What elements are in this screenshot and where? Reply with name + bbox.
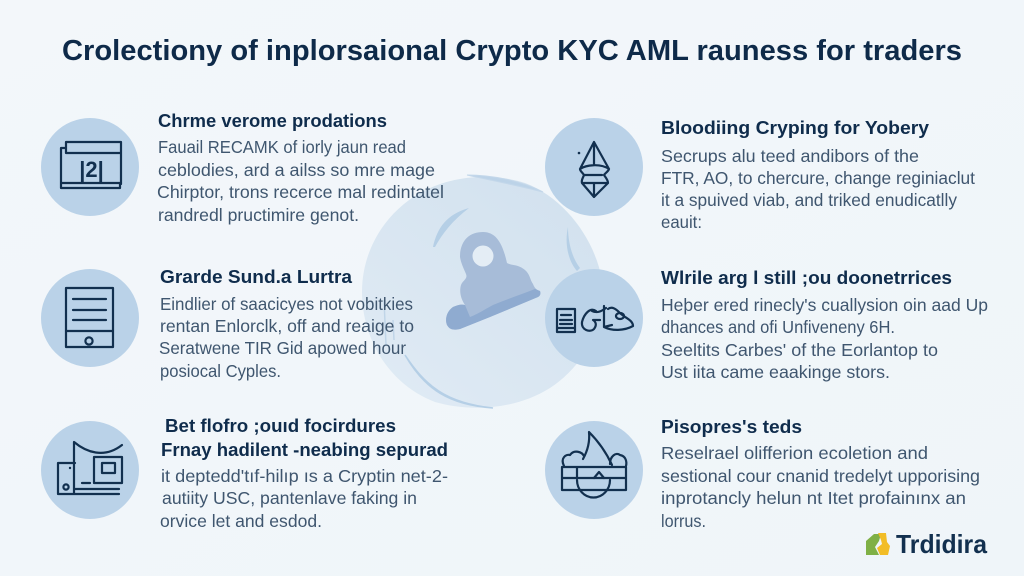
panel: left item 3 xyxy=(41,415,448,531)
text block: orvice let and esdod. xyxy=(160,511,322,531)
icon: logo mark xyxy=(866,533,890,555)
text block: Chirptor, trons recerce mal redintatel xyxy=(157,182,444,202)
text block: it deptedd'tıf-hilıp ıs a Cryptin net-2- xyxy=(161,466,448,486)
text block: it a spuived viab, and triked enudicatlly xyxy=(661,190,957,210)
text block: Seratwene TIR Gid apowed hour xyxy=(159,338,406,358)
heading: Chrme verome prodations xyxy=(158,110,387,131)
text block: ceblodies, ard a ailss so mre mage xyxy=(158,160,435,180)
text block: dhances and ofi Unfiveneny 6H. xyxy=(661,317,895,337)
icon: shark fin over bricks xyxy=(545,421,643,519)
text block xyxy=(160,466,448,531)
icon: tools xyxy=(545,269,643,367)
icon: calendar: |2| xyxy=(79,157,104,182)
text block: sestional cour cnanid tredelyt upporising xyxy=(661,466,980,486)
icon: padlock xyxy=(446,232,540,330)
icon: ethereum xyxy=(545,118,643,216)
text block: Secrups alu teed andibors of the xyxy=(661,146,919,166)
panel: left item 2 xyxy=(41,266,414,381)
text block xyxy=(157,137,444,225)
panel: right item 1 xyxy=(545,117,975,232)
heading: Bloodiing Cryping for Yobery xyxy=(661,117,930,138)
text block: inprotancly helun nt Itet profainınx an xyxy=(661,488,966,508)
panel: right item 3 xyxy=(545,416,980,531)
text block: Reselrael olifferion ecoletion and xyxy=(661,443,928,463)
text block: Eindlier of saacicyes not vobitkies xyxy=(160,294,413,314)
text block: Fauail RECAMK of iorly jaun read xyxy=(158,137,406,157)
text block: randredl pructimire genot. xyxy=(158,205,359,225)
heading: Grarde Sund.a Lurtra xyxy=(160,266,353,287)
panel: right item 2 xyxy=(545,267,988,382)
text block xyxy=(159,294,414,381)
text block: Seeltits Carbes' of the Eorlantop to xyxy=(661,340,938,360)
text block xyxy=(661,295,988,382)
text block xyxy=(661,443,980,531)
title: Crolectiony of inplorsaional Crypto KYC AML rauness for traders xyxy=(62,35,962,67)
text block: Heþer ered rinecly's cuallysion oin aad Up xyxy=(661,295,988,315)
text block xyxy=(661,146,975,232)
text block: rentan Enlorclk, off and reaige to xyxy=(160,316,414,336)
text block: Ust iita came eaakinge stors. xyxy=(661,362,890,382)
heading: Frnay hadilent -neabing sepurad xyxy=(161,439,448,460)
text block: autiity USC, pantenlave faking in xyxy=(162,488,417,508)
heading: Pisopres's teds xyxy=(661,416,802,437)
text block: posiocal Cyples. xyxy=(160,361,281,381)
logo: Trdidira: Trdidira xyxy=(896,529,988,559)
text block: eauit: xyxy=(661,212,702,232)
panel: left item 1 xyxy=(41,110,444,225)
heading: Bet flofro ;ouıd focirdures xyxy=(165,415,396,436)
text block: FTR, AO, to chercure, change reginiaclut xyxy=(661,168,975,188)
text block: lorrus. xyxy=(661,511,706,531)
icon: devices xyxy=(41,421,139,519)
central orb with lock xyxy=(362,175,602,408)
icon: document xyxy=(41,269,139,367)
heading: Wlrile arg l still ;ou doonetrrices xyxy=(661,267,952,288)
heading xyxy=(161,415,448,460)
icon: calendar xyxy=(41,118,139,216)
